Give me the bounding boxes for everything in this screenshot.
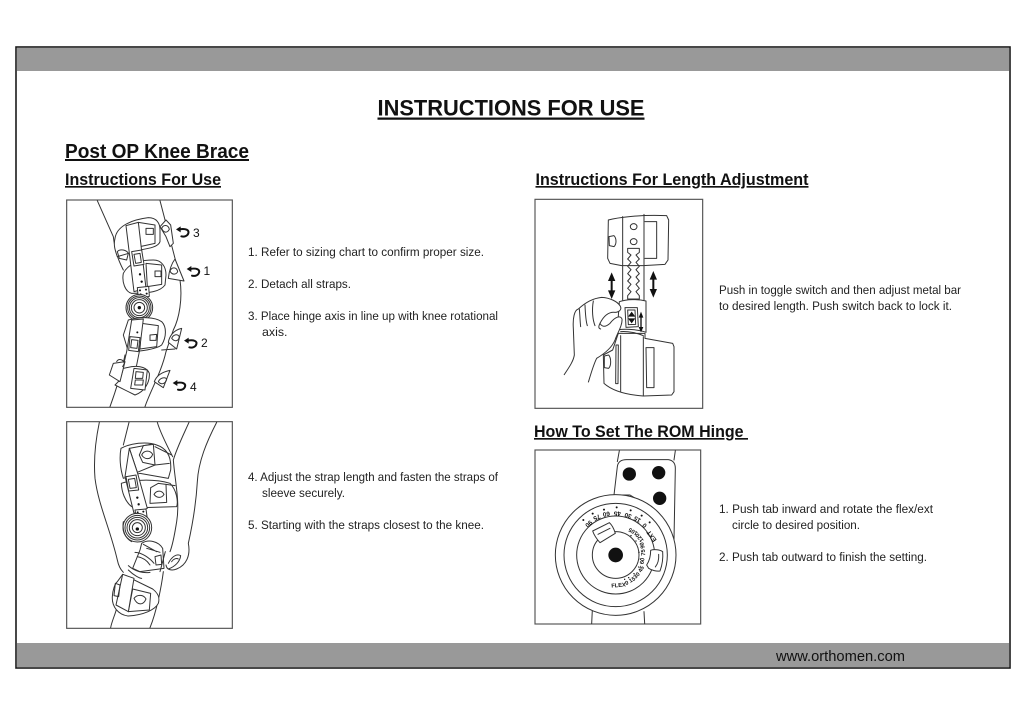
inner scale labels <box>611 526 647 590</box>
strap numbers: 4 <box>190 380 197 394</box>
upper strap <box>120 443 171 478</box>
panel: length adjustment diagram <box>535 199 703 408</box>
text block: length adjustment <box>719 283 961 313</box>
text block: steps 1-3: axis. <box>262 325 287 339</box>
top grey band <box>17 48 1009 71</box>
strap numbers <box>190 226 210 394</box>
website address: www.orthomen.com <box>775 649 905 665</box>
outer scale labels: EXT <box>646 529 659 543</box>
hand <box>564 297 622 382</box>
text block: length adjustment: Push in toggle switch and then adjust metal bar <box>719 283 961 297</box>
inner scale labels: 15 <box>628 576 637 585</box>
panel: fastening the straps diagram <box>67 422 232 628</box>
product heading: Post OP Knee Brace <box>65 141 249 163</box>
lower bar <box>120 319 143 385</box>
inner scale labels: 75 <box>641 549 647 556</box>
lower cuff <box>603 333 674 396</box>
bottom strap <box>112 574 159 616</box>
toothed slot <box>628 248 639 299</box>
inner scale labels: FLEX <box>611 582 626 590</box>
third strap <box>123 318 165 352</box>
second strap <box>123 260 166 293</box>
tab right <box>647 550 663 571</box>
text block: ROM hinge steps: 1. Push tab inward and rotate the flex/ext <box>719 502 934 516</box>
title: INSTRUCTIONS FOR USE <box>378 96 645 120</box>
heading: length adjustment: Instructions For Length Adjustment <box>536 170 809 189</box>
inner scale labels: 60 <box>640 558 647 565</box>
bottom grey band <box>17 643 1009 667</box>
panel: brace strap diagram <box>67 200 232 407</box>
outer scale labels: 30 <box>624 511 633 519</box>
inner scale labels: 0 <box>625 580 629 587</box>
outer scale labels: 90 <box>583 518 593 529</box>
text block: ROM hinge steps: 2. Push tab outward to finish the setting. <box>719 550 927 564</box>
tab left <box>593 523 615 543</box>
dial scale marks <box>582 506 651 580</box>
outer scale labels: 60 <box>602 509 610 518</box>
inner scale labels: 120 <box>635 532 645 543</box>
inner scale labels: 30 <box>633 572 642 580</box>
bottom strap <box>115 366 149 395</box>
outer scale labels: 75 <box>592 512 601 522</box>
text block: steps 4-5: 5. Starting with the straps closest to the knee. <box>248 518 484 532</box>
outer scale labels: 15 <box>632 514 642 524</box>
numbered arrows <box>173 226 199 390</box>
upper bar <box>126 222 146 292</box>
second strap <box>121 480 177 508</box>
text block: steps 1-3 <box>248 245 498 339</box>
text block: steps 4-5 <box>248 470 499 532</box>
hinge <box>123 513 152 542</box>
lower strap and hand <box>133 541 164 572</box>
text block: length adjustment: to desired length. Push switch back to lock it. <box>719 299 952 313</box>
hinge <box>126 294 153 321</box>
outer scale labels: 0 <box>641 521 649 529</box>
strap numbers: 3 <box>193 226 200 240</box>
slider housing <box>617 300 646 332</box>
text block: steps 1-3: 1. Refer to sizing chart to confirm proper size. <box>248 245 484 259</box>
upper cuff <box>608 215 669 266</box>
text block: steps 4-5: 4. Adjust the strap length and fasten the straps of <box>248 470 499 484</box>
text block: steps 1-3: 2. Detach all straps. <box>248 277 351 291</box>
inner scale labels: 105 <box>628 526 639 536</box>
text block: steps 4-5: sleeve securely. <box>262 486 345 500</box>
inner scale labels: 90 <box>639 541 647 549</box>
outer scale labels <box>583 509 659 543</box>
panel: ROM hinge dial diagram <box>535 450 701 624</box>
top strap <box>114 218 160 257</box>
outer scale labels: 45 <box>613 509 621 516</box>
text block: steps 1-3: 3. Place hinge axis in line up with knee rotational <box>248 309 498 323</box>
text block: ROM hinge steps: circle to desired position. <box>732 518 860 532</box>
strap numbers: 1 <box>204 264 210 278</box>
heading: ROM hinge: How To Set The ROM Hinge <box>534 422 748 441</box>
heading: instructions for use: Instructions For Use <box>65 170 221 189</box>
small arrow <box>639 316 643 330</box>
strap numbers: 2 <box>201 336 208 350</box>
text block: ROM hinge steps <box>719 502 934 564</box>
upper bar <box>125 448 147 513</box>
large arrows <box>609 278 615 293</box>
inner scale labels: 45 <box>638 565 646 574</box>
